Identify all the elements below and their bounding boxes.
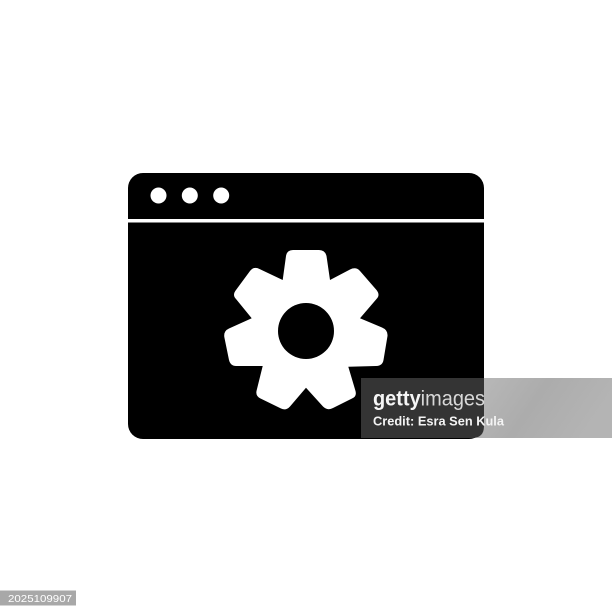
title bar divider [128,219,484,222]
app window icon [128,173,484,439]
window control dots [150,188,229,204]
id tag background [0,590,76,606]
watermark light band [476,378,612,438]
gear centre hole [278,303,334,359]
watermark dark band [361,378,484,438]
image id tag [0,590,76,606]
watermark: getty images [361,378,612,438]
icon: gear [224,250,388,409]
watermark logo: gettyimages [373,388,485,410]
watermark credit: Credit: Esra Sen Kula [373,414,505,428]
window body [128,173,484,439]
id tag number: 2025109907 [8,593,72,605]
